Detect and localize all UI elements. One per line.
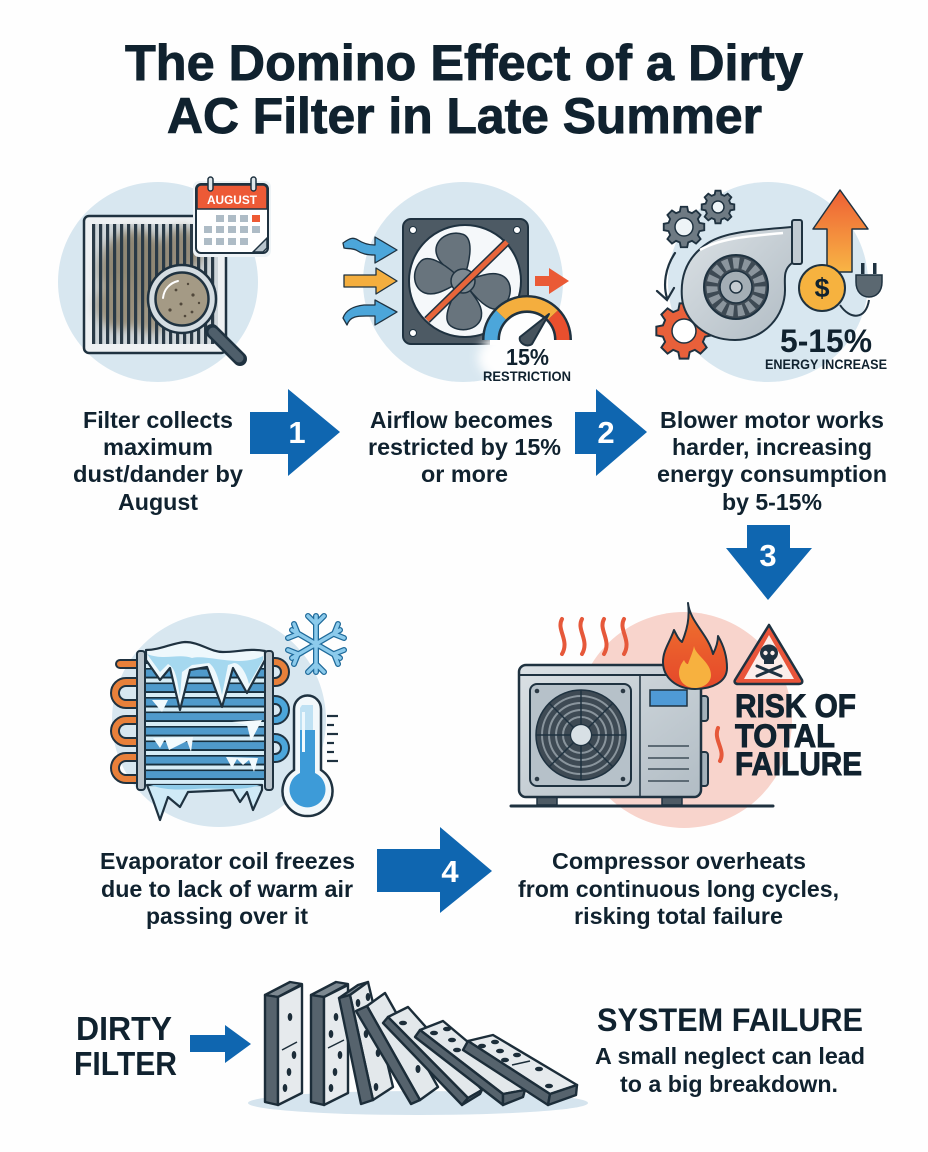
arrow 1: 1 xyxy=(288,415,306,450)
text: step 3: Blower motor works xyxy=(660,407,884,433)
label: dirty filter xyxy=(74,1010,177,1082)
text: step 3: by 5-15% xyxy=(722,489,822,515)
text: system failure xyxy=(595,1002,865,1097)
icon: dirty filter xyxy=(84,216,226,353)
panel: fan illustration xyxy=(343,182,578,388)
icon: dollar coin: $ xyxy=(814,273,830,303)
arrow 1 xyxy=(250,389,340,476)
icon: warning triangle with skull xyxy=(735,625,802,684)
arrow 4: 4 xyxy=(441,854,459,889)
text: step 1: maximum xyxy=(103,434,213,460)
arrow 3: 3 xyxy=(759,538,777,573)
panel: filter illustration xyxy=(58,177,271,382)
arrow 3 xyxy=(726,525,812,600)
callout: risk of total failure: RISK OF xyxy=(735,688,856,724)
title xyxy=(125,35,803,144)
callout: risk of total failure: TOTAL xyxy=(735,718,835,754)
stat: 5-15% energy increase: ENERGY INCREASE xyxy=(765,356,887,372)
stat: 15% restriction: RESTRICTION xyxy=(483,368,571,384)
stat: 15% restriction xyxy=(483,344,571,384)
icon: outgoing air arrow xyxy=(535,268,569,294)
panel: frozen evaporator coil illustration xyxy=(112,613,344,827)
icon: coil side plates xyxy=(137,651,273,790)
icon: rotation arrow xyxy=(657,253,675,300)
callout: risk of total failure xyxy=(735,688,862,782)
text: step 4 compressor: risking total failure xyxy=(574,903,783,929)
label: dirty filter: FILTER xyxy=(74,1045,177,1082)
icon: restricted fan xyxy=(403,219,528,344)
text: step 2: or more xyxy=(421,461,508,487)
icon: dollar coin xyxy=(799,265,869,316)
text: system failure: A small neglect can lead xyxy=(595,1043,865,1069)
text: step 2: restricted by 15% xyxy=(368,434,561,460)
domino 3 xyxy=(339,982,393,1104)
text: step 5 evaporator xyxy=(100,848,355,929)
text: step 4 compressor: from continuous long cycles, xyxy=(518,876,839,902)
text: step 4 compressor: Compressor overheats xyxy=(552,848,806,874)
text: step 1: Filter collects xyxy=(83,407,233,433)
domino 1 xyxy=(265,982,302,1105)
icon: copper tubes xyxy=(115,662,285,779)
icon: outdoor AC unit xyxy=(511,665,773,806)
text: step 2 xyxy=(368,407,561,487)
icon: power plug xyxy=(856,263,882,297)
text: step 2: Airflow becomes xyxy=(370,407,553,433)
text: step 3: harder, increasing xyxy=(672,434,872,460)
text: step 5 evaporator: passing over it xyxy=(146,903,308,929)
text: step 3: energy consumption xyxy=(657,461,887,487)
icon: energy cost arrow xyxy=(813,190,868,272)
stat: 15% restriction: 15% xyxy=(506,344,549,370)
arrow 2: 2 xyxy=(597,415,615,450)
domino 4 xyxy=(356,993,438,1104)
dominoes falling xyxy=(248,982,588,1115)
text: step 5 evaporator: due to lack of warm air xyxy=(101,876,353,902)
stat: 5-15% energy increase xyxy=(765,323,887,372)
stat: 5-15% energy increase: 5-15% xyxy=(780,323,872,359)
arrow 2 xyxy=(575,389,647,476)
arrow 4 xyxy=(377,827,492,913)
icon: August calendar xyxy=(193,177,271,257)
icon: magnifying glass xyxy=(148,265,240,359)
label: dirty filter: DIRTY xyxy=(76,1010,172,1047)
icon: ice on coil xyxy=(146,642,265,820)
icon: heat waves xyxy=(560,619,722,761)
arrow: filter to dominoes xyxy=(190,1025,251,1063)
text: step 1: August xyxy=(118,489,198,515)
text: step 3 xyxy=(657,407,887,515)
icon: gears xyxy=(656,191,734,359)
text: system failure: SYSTEM FAILURE xyxy=(597,1002,863,1038)
domino 6 xyxy=(415,1021,525,1105)
icon: snowflake xyxy=(288,616,344,672)
panel: overheating compressor illustration xyxy=(511,603,862,828)
title: AC Filter in Late Summer xyxy=(167,88,762,144)
panel: blower motor illustration xyxy=(656,182,887,382)
icon: August calendar: AUGUST xyxy=(207,195,257,207)
icon: flame xyxy=(663,603,727,689)
callout: risk of total failure: FAILURE xyxy=(735,746,862,782)
text: step 5 evaporator: Evaporator coil freezes xyxy=(100,848,355,874)
text: step 4 compressor xyxy=(518,848,839,929)
text: step 1: dust/dander by xyxy=(73,461,243,487)
domino 5 xyxy=(383,1007,482,1105)
gauge: airflow restriction xyxy=(478,303,578,388)
icon: coil fins xyxy=(145,660,267,784)
title: The Domino Effect of a Dirty xyxy=(125,35,803,91)
icon: thermometer xyxy=(282,696,338,816)
text: step 1 xyxy=(73,407,243,515)
icon: blower turbine xyxy=(682,220,802,340)
domino 2 xyxy=(311,982,348,1105)
domino 7 xyxy=(463,1035,577,1105)
text: system failure: to a big breakdown. xyxy=(620,1071,838,1097)
icon: incoming air arrows xyxy=(343,237,397,325)
